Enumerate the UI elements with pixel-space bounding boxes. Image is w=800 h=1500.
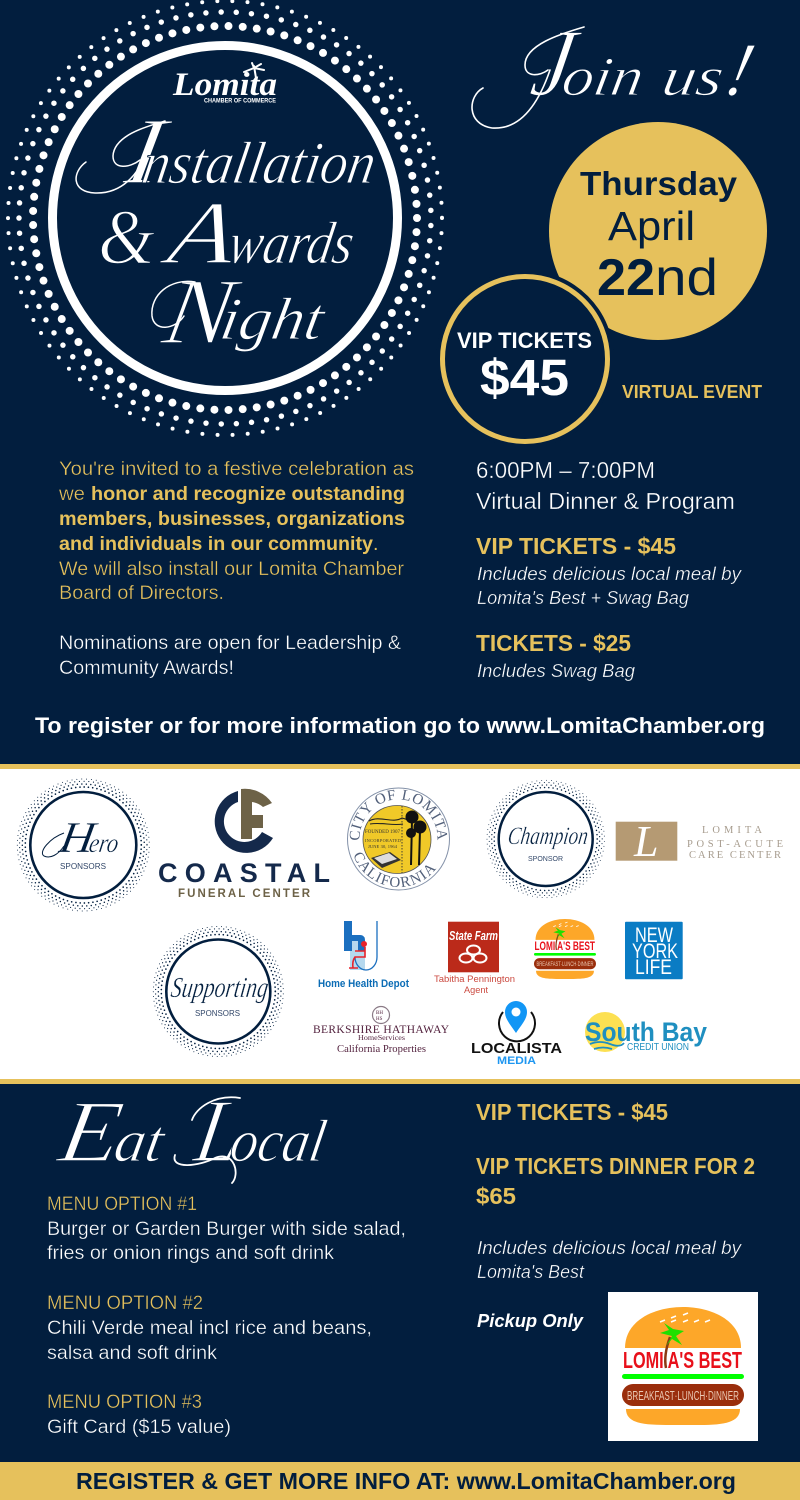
- logo: Localista Media: MEDIA: [497, 1055, 536, 1067]
- text block: VIP ticket price: [476, 533, 743, 608]
- text block: menu option 2: Chili Verde meal incl rice and beans,: [47, 1317, 372, 1339]
- badge: Champion sponsor: [487, 780, 604, 898]
- badge: Supporting sponsors: SPONSORS: [195, 1009, 240, 1018]
- badge: Hero sponsors: SPONSORS: [60, 862, 106, 871]
- text block: meal description: Lomita's Best: [477, 1261, 585, 1282]
- logo: Lomita Chamber of Commerce: Lomita: [172, 67, 277, 103]
- logo: Berkshire Hathaway: California Properties: [337, 1043, 426, 1055]
- logo: South Bay Credit Union: South Bay: [585, 1017, 707, 1047]
- heading: Installation & Awards Night: &: [98, 193, 155, 280]
- text block: menu option 3: MENU OPTION #3: [47, 1391, 202, 1413]
- logo: Berkshire Hathaway: BERKSHIRE HATHAWAY: [313, 1024, 450, 1036]
- logo: City of Lomita seal: INCORPORATED: [365, 838, 401, 843]
- text block: dinner ticket prices: [476, 1099, 755, 1209]
- text block: menu option 2: MENU OPTION #2: [47, 1292, 203, 1314]
- text block: meal description: Includes delicious local meal by: [477, 1237, 743, 1258]
- badge: Hero sponsors: ero: [87, 828, 121, 858]
- badge: Supporting sponsors: Supporting: [169, 972, 270, 1004]
- heading: Eat Local: E: [50, 1084, 130, 1181]
- text block: menu option 3: [47, 1391, 231, 1438]
- text block: invitation: [58, 458, 414, 604]
- text block: VIP ticket price: VIP TICKETS - $45: [476, 533, 676, 559]
- text block: invitation: members, businesses, organizations: [59, 508, 405, 530]
- label: virtual event: VIRTUAL EVENT: [622, 382, 762, 402]
- text block: menu option 2: [47, 1292, 372, 1364]
- logo: Lomita's Best small: [534, 919, 596, 979]
- logo: New York Life: NEW: [635, 924, 673, 947]
- text block: invitation: We will also install our Lomita Chamber: [59, 558, 405, 580]
- badge: Hero sponsors: H: [55, 812, 101, 862]
- badge: Supporting sponsors: [153, 926, 283, 1056]
- price badge: VIP tickets $45: [436, 270, 614, 448]
- date badge: Thursday April 22nd: Thursday: [580, 165, 738, 202]
- footer band: register: [0, 1462, 800, 1500]
- logo: Berkshire Hathaway: HomeServices: [358, 1034, 405, 1042]
- logo: New York Life: [625, 922, 683, 979]
- panel: sponsors: [0, 764, 800, 1121]
- date badge: Thursday April 22nd: [549, 122, 767, 340]
- text block: nominations: Community Awards!: [59, 657, 234, 679]
- logo: South Bay Credit Union: [585, 1012, 707, 1053]
- logo: Home Health Depot: Home Health Depot: [318, 978, 409, 990]
- text block: event time: [476, 457, 735, 514]
- text block: general ticket price: TICKETS - $25: [476, 630, 631, 656]
- logo: State Farm: State Farm: [449, 928, 498, 943]
- heading: Installation & Awards Night: wards: [224, 210, 359, 277]
- heading: Installation & Awards Night: I: [117, 99, 178, 204]
- text block: menu option 1: fries or onion rings and soft drink: [47, 1242, 334, 1264]
- logo: Berkshire Hathaway: [313, 1006, 450, 1055]
- heading: Join us!: !: [718, 27, 763, 112]
- heading: Join us!: oin: [558, 46, 649, 107]
- heading: Join us!: us: [658, 46, 729, 107]
- logo: Localista Media: LOCALISTA: [471, 1040, 562, 1057]
- footer band: register: REGISTER & GET MORE INFO AT: www.LomitaChamber.org: [76, 1468, 736, 1494]
- logo: Lomita's Best large: LOMI A'S BEST: [623, 1347, 742, 1373]
- logo: Berkshire Hathaway: HS: [376, 1017, 383, 1022]
- logo: State Farm: Tabitha Pennington: [434, 974, 515, 985]
- panel: title badge with dotted ring: [8, 1, 442, 435]
- text block: dinner ticket prices: VIP TICKETS DINNER FOR 2: [476, 1153, 755, 1179]
- logo: Coastal Funeral Center: FUNERAL CENTER: [178, 888, 311, 900]
- badge: Champion sponsor: SPONSOR: [528, 854, 564, 863]
- logo: Lomita Post-Acute Care Center: L: [633, 817, 658, 866]
- logo: State Farm: Agent: [464, 985, 488, 996]
- logo: State Farm: [434, 922, 515, 996]
- logo: Coastal Funeral Center: [158, 789, 330, 900]
- text block: dinner ticket prices: $65: [476, 1183, 516, 1209]
- text block: VIP ticket price: Includes delicious local meal by: [477, 563, 743, 584]
- logo: Lomita's Best small: BREAKFAST·LUNCH·DINNER: [537, 961, 594, 968]
- logo: City of Lomita seal: CITY OF LOMITA: [350, 790, 448, 840]
- text block: nominations: Nominations are open for Leadership &: [59, 632, 401, 654]
- text block: invitation: You're invited to a festive celebration as: [59, 458, 414, 480]
- logo: City of Lomita seal: [347, 788, 450, 890]
- heading: Installation & Awards Night: nstallation: [138, 130, 381, 197]
- text block: invitation: and individuals in our community: [59, 533, 373, 555]
- logo: Lomita Chamber of Commerce: CHAMBER OF COMMERCE: [204, 98, 276, 104]
- heading: Eat Local: [50, 1081, 331, 1183]
- logo: City of Lomita seal: CALIFORNIA: [354, 852, 436, 888]
- text block: invitation: honor and recognize outstanding: [91, 483, 405, 505]
- text block: VIP ticket price: Lomita's Best + Swag Bag: [477, 587, 690, 608]
- heading: Installation & Awards Night: A: [156, 183, 246, 283]
- text block: menu option 2: salsa and soft drink: [47, 1342, 217, 1364]
- logo: City of Lomita seal: FOUNDED 1907: [365, 830, 400, 835]
- logo: Home Health Depot: [318, 921, 409, 990]
- logo: Localista Media: [471, 1001, 562, 1067]
- logo: South Bay Credit Union: CREDIT UNION: [627, 1042, 689, 1053]
- logo: Lomita's Best small: LOMI A'S BEST: [535, 940, 595, 953]
- logo: City of Lomita seal: JUNE 30, 1964: [368, 844, 398, 850]
- logo: Lomita's Best large: [608, 1292, 758, 1441]
- call to action: register: To register or for more information go to www.LomitaChamber.org: [35, 713, 765, 738]
- badge: Hero sponsors: [17, 779, 149, 911]
- text block: nominations: [59, 632, 401, 679]
- logo: New York Life: YORK: [632, 940, 678, 963]
- badge: Champion sponsor: Champion: [506, 823, 590, 850]
- date badge: Thursday April 22nd: 22: [597, 249, 655, 307]
- text block: general ticket price: [476, 630, 636, 681]
- heading: Eat Local: L: [187, 1081, 250, 1181]
- text block: event time: Virtual Dinner & Program: [476, 488, 735, 514]
- heading: Eat Local: ocal: [226, 1108, 331, 1175]
- text block: event time: 6:00PM – 7:00PM: [476, 457, 655, 483]
- price badge: VIP tickets $45: VIP TICKETS: [457, 328, 592, 353]
- text block: invitation: Board of Directors.: [59, 582, 224, 604]
- logo: Lomita Post-Acute Care Center: POST-ACUTE: [687, 839, 783, 850]
- heading: Installation & Awards Night: [76, 99, 381, 364]
- heading: Join us!: J: [524, 10, 587, 116]
- date badge: Thursday April 22nd: April: [608, 203, 695, 249]
- text block: general ticket price: Includes Swag Bag: [477, 660, 636, 681]
- price badge: VIP tickets $45: $45: [480, 349, 569, 406]
- logo: New York Life: LIFE: [635, 956, 672, 979]
- logo: Lomita Post-Acute Care Center: LOMITA: [702, 825, 762, 836]
- logo: Berkshire Hathaway: BH: [376, 1011, 383, 1016]
- date badge: Thursday April 22nd: nd: [655, 249, 718, 307]
- text block: menu option 1: MENU OPTION #1: [47, 1193, 197, 1215]
- text block: dinner ticket prices: VIP TICKETS - $45: [476, 1099, 668, 1125]
- text block: meal description: [477, 1237, 743, 1282]
- heading: Installation & Awards Night: ight: [216, 286, 331, 353]
- logo: Lomita Post-Acute Care Center: CARE CENTER: [689, 850, 781, 861]
- text block: invitation: .: [373, 533, 378, 555]
- text block: menu option 1: Burger or Garden Burger with side salad,: [47, 1218, 406, 1240]
- logo: Coastal Funeral Center: COASTAL: [158, 858, 330, 888]
- heading: Installation & Awards Night: N: [155, 261, 248, 364]
- text block: menu option 1: [47, 1193, 406, 1264]
- text block: invitation: we: [58, 483, 85, 505]
- heading: Eat Local: at: [110, 1108, 170, 1175]
- heading: Join us!: [472, 10, 763, 128]
- label: pickup only: Pickup Only: [477, 1311, 584, 1331]
- text block: menu option 3: Gift Card ($15 value): [47, 1416, 231, 1438]
- logo: Lomita Post-Acute Care Center: [616, 817, 783, 866]
